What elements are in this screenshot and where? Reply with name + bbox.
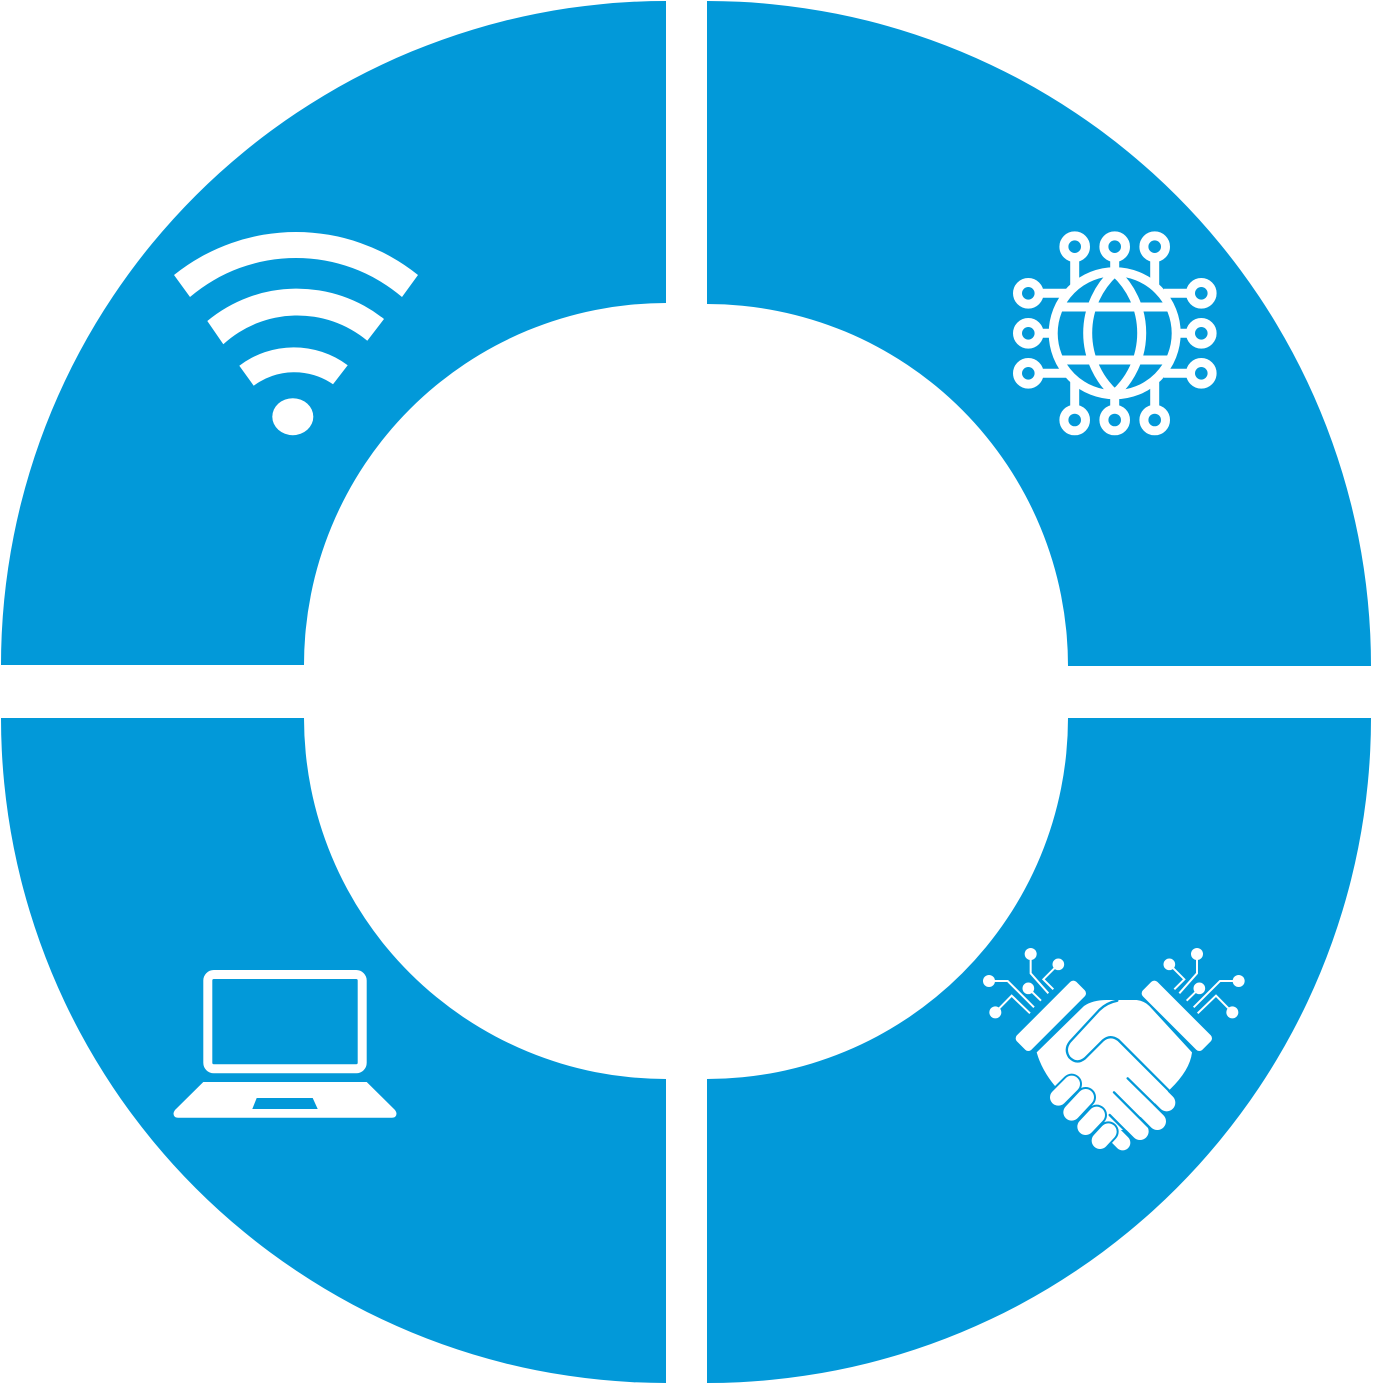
right circuit wires — [1163, 948, 1245, 1018]
icon: laptop — [174, 974, 396, 1118]
fingers — [1107, 1063, 1167, 1143]
panel: top-right ring segment — [707, 1, 1371, 666]
right cuff — [1146, 985, 1208, 1047]
left circuit wires — [983, 948, 1064, 1018]
icon: wifi — [174, 232, 418, 435]
panel: bottom-left ring segment — [1, 718, 666, 1383]
left hand fingers — [1058, 1084, 1108, 1141]
left cuff — [1020, 985, 1082, 1047]
thumb and finger outlines — [1067, 1001, 1174, 1140]
panel: top-left ring segment — [1, 1, 666, 665]
icon: digital handshake — [983, 948, 1245, 1143]
clasped hands — [1037, 1000, 1192, 1130]
icon: globe network — [1018, 236, 1212, 431]
panel: bottom-right ring segment — [707, 718, 1371, 1383]
